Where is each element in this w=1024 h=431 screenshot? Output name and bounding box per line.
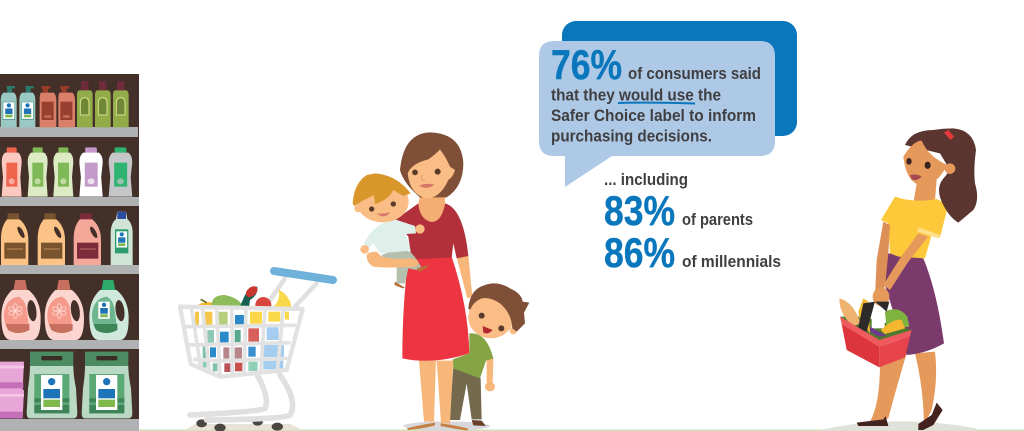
mother: top, neck, head	[395, 203, 468, 259]
woman with shopping basket	[820, 128, 977, 431]
stat: 83 percent of parents: 83%	[604, 187, 675, 234]
ground shadow	[403, 421, 490, 431]
products: lower shelves	[0, 280, 132, 418]
products: top and upper shelves	[1, 81, 133, 265]
basket mesh	[180, 307, 303, 377]
contents seen through mesh	[195, 312, 289, 372]
panel: store shelf with products	[0, 74, 139, 431]
ground line	[139, 430, 1024, 431]
boy: head	[468, 296, 514, 338]
shelf boards	[0, 127, 139, 431]
stat: 76 percent of consumers	[551, 41, 761, 146]
mother: legs, shoes, skirt	[419, 361, 436, 422]
stat: 86 percent of millennials	[604, 229, 781, 276]
stat: 76 percent of consumers: that they would use the	[551, 86, 721, 104]
baby: pants, shirt, head	[382, 251, 422, 283]
groceries	[194, 302, 217, 318]
stat: 83 percent of parents: of parents	[682, 210, 753, 229]
stat: 86 percent of millennials: 86%	[604, 229, 675, 276]
speech bubble: front	[539, 41, 775, 187]
basket back fill	[179, 306, 303, 377]
cart frame and wheels	[196, 419, 207, 427]
legs and shoes	[870, 353, 907, 422]
ground shadow	[820, 421, 977, 431]
stat: 76 percent of consumers: Safer Choice label to inform	[551, 106, 756, 125]
underline: would use	[618, 102, 695, 104]
stat: 76 percent of consumers: purchasing decisions.	[551, 126, 712, 146]
mother with two children	[353, 132, 529, 431]
head and hair	[905, 128, 977, 223]
red basket	[840, 317, 912, 347]
stat: 86 percent of millennials: of millennials	[682, 252, 781, 271]
scrunchie	[944, 130, 954, 140]
boy: pants and shirt	[449, 367, 482, 420]
stat: 83 percent of parents	[604, 187, 753, 234]
speech bubble: back	[562, 21, 797, 136]
skirt	[883, 253, 944, 355]
basket groceries	[840, 317, 912, 342]
stat: 76 percent of consumers: 76%	[551, 41, 622, 88]
cart handle	[274, 271, 333, 280]
text: including: ... including	[604, 170, 688, 189]
shopping cart	[179, 271, 333, 431]
neck, top, arms	[913, 180, 937, 203]
stat: 76 percent of consumers: of consumers said	[628, 64, 761, 83]
